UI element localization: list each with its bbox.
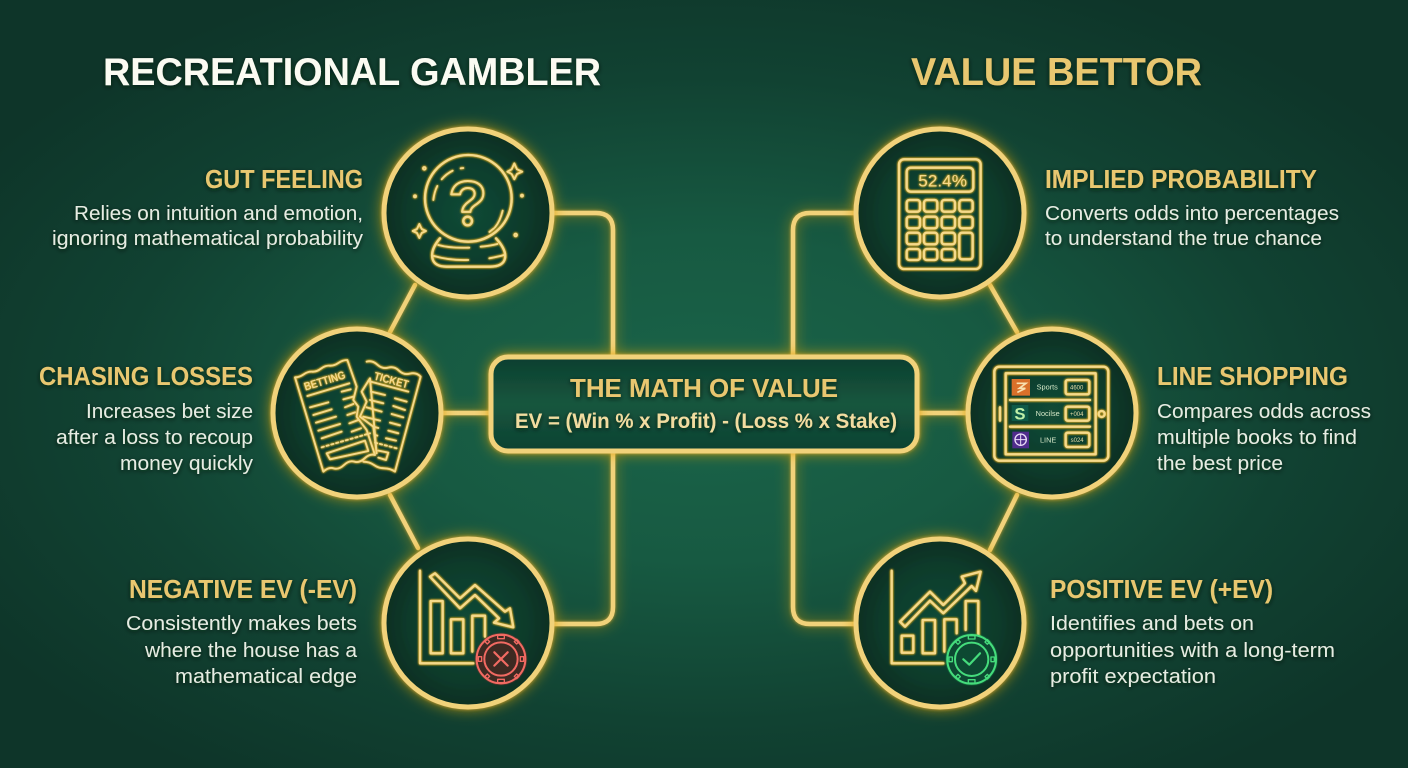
icon: falling chart bbox=[420, 571, 513, 663]
center box bbox=[491, 357, 917, 451]
description: opportunities with a long-term bbox=[1050, 640, 1335, 662]
node: line shopping bbox=[968, 329, 1136, 497]
description: Identifies and bets on bbox=[1050, 613, 1254, 635]
icon: tablet with odds: Sports bbox=[1037, 383, 1058, 392]
heading: CHASING LOSSES bbox=[39, 361, 253, 391]
center panel: the math of value bbox=[491, 357, 917, 451]
title: value bettor: VALUE BETTOR bbox=[911, 51, 1202, 94]
description: where the house has a bbox=[144, 640, 358, 662]
description: ignoring mathematical probability bbox=[52, 228, 363, 250]
description: Relies on intuition and emotion, bbox=[74, 203, 363, 225]
heading: GUT FEELING bbox=[205, 164, 363, 194]
description: Consistently makes bets bbox=[126, 613, 357, 635]
text: negative ev bbox=[126, 574, 358, 688]
icon: torn betting tickets bbox=[295, 360, 421, 472]
description bbox=[1157, 401, 1371, 475]
text: positive ev bbox=[1050, 574, 1335, 688]
icon: crystal ball: ? bbox=[448, 169, 487, 239]
description: multiple books to find bbox=[1157, 427, 1357, 449]
circle bbox=[856, 539, 1024, 707]
heading: LINE SHOPPING bbox=[1157, 361, 1348, 391]
icon: crystal ball bbox=[413, 155, 523, 267]
description: to understand the true chance bbox=[1045, 228, 1322, 250]
icon: tablet with odds: Nocilse bbox=[1036, 409, 1060, 418]
text: implied probability bbox=[1045, 164, 1339, 250]
connector lines bbox=[390, 213, 1017, 624]
description: mathematical edge bbox=[175, 666, 357, 688]
icon: tablet with odds: +004 bbox=[1070, 412, 1084, 418]
icon: torn betting tickets: BETTING bbox=[303, 370, 347, 394]
text: line shopping bbox=[1157, 361, 1371, 475]
icon: tablet with odds bbox=[994, 367, 1108, 461]
description: money quickly bbox=[120, 453, 253, 475]
circle bbox=[856, 129, 1024, 297]
description: the best price bbox=[1157, 453, 1283, 475]
icon: calculator bbox=[899, 159, 981, 269]
text: chasing losses bbox=[39, 361, 253, 475]
description bbox=[1050, 613, 1335, 688]
description bbox=[126, 613, 358, 688]
node: implied probability bbox=[856, 129, 1024, 297]
circle bbox=[384, 129, 552, 297]
node: chasing losses bbox=[273, 329, 441, 497]
node: positive ev bbox=[856, 539, 1024, 707]
icon: red chip with x bbox=[477, 635, 525, 683]
circle bbox=[968, 329, 1136, 497]
icon: tablet with odds: s024 bbox=[1071, 438, 1084, 444]
description: Compares odds across bbox=[1157, 401, 1371, 423]
icon: calculator: 52.4% bbox=[918, 171, 967, 190]
center heading: THE MATH OF VALUE bbox=[570, 373, 838, 403]
icon: torn betting tickets: TICKET bbox=[373, 371, 410, 391]
description: after a loss to recoup bbox=[56, 427, 253, 449]
description: Increases bet size bbox=[86, 401, 253, 423]
icon: tablet with odds: 4600 bbox=[1070, 385, 1084, 391]
heading: IMPLIED PROBABILITY bbox=[1045, 164, 1317, 194]
EV formula: EV = (Win % x Profit) - (Loss % x Stake) bbox=[515, 410, 897, 433]
description bbox=[52, 203, 363, 250]
icon: green chip with check bbox=[947, 635, 996, 684]
text: gut feeling bbox=[52, 164, 363, 250]
description: Converts odds into percentages bbox=[1045, 203, 1339, 225]
circle bbox=[384, 539, 552, 707]
description: profit expectation bbox=[1050, 666, 1216, 688]
heading: NEGATIVE EV (-EV) bbox=[129, 574, 357, 604]
heading: POSITIVE EV (+EV) bbox=[1050, 574, 1273, 604]
node: gut feeling bbox=[384, 129, 552, 297]
description bbox=[1045, 203, 1339, 250]
title: recreational gambler: RECREATIONAL GAMBLER bbox=[103, 51, 601, 94]
icon: tablet with odds: LINE bbox=[1040, 435, 1056, 444]
node: negative ev bbox=[384, 539, 552, 707]
description bbox=[56, 401, 253, 475]
circle bbox=[273, 329, 441, 497]
icon: tablet with odds: S bbox=[1014, 404, 1026, 423]
icon: rising chart bbox=[892, 571, 981, 663]
